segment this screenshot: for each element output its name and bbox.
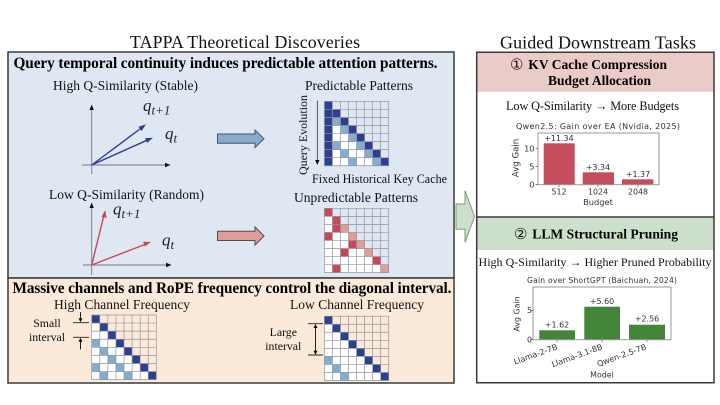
bar chart: gain over ShortGPT: +5.60	[590, 297, 614, 306]
heatmap: high channel frequency	[92, 315, 156, 380]
chart: stable query vectors: t	[174, 130, 178, 146]
title: TAPPA Theoretical Discoveries: TAPPA Theoretical Discoveries	[130, 32, 360, 52]
bar chart: Qwen2.5 gain over EA: 0	[529, 180, 534, 190]
bar chart: gain over ShortGPT: +2.56	[635, 315, 659, 324]
title: Guided Downstream Tasks: Guided Downstream Tasks	[500, 32, 696, 52]
chart: random query vectors: t	[170, 237, 174, 252]
text: high Q-similarity higher pruned probability: High Q-Similarity → Higher Pruned Probability	[478, 255, 712, 269]
heatmap: predictable attention	[324, 101, 389, 166]
bar chart: gain over ShortGPT: Qwen-2.5-7B	[596, 342, 648, 369]
label: query evolution: Query Evolution	[296, 95, 310, 175]
bar chart: Qwen2.5 gain over EA: 5	[529, 162, 534, 172]
chart: random query vectors	[83, 200, 174, 275]
chart: stable query vectors: q	[143, 96, 152, 115]
label: low channel frequency: Low Channel Frequency	[290, 297, 424, 312]
label: high Q-similarity: High Q-Similarity (Stable)	[53, 78, 198, 93]
annotation: large interval arrow	[308, 324, 323, 355]
label: small interval: Small	[33, 316, 61, 330]
bar chart: gain over ShortGPT: Model	[590, 371, 614, 380]
heatmap: low channel frequency	[324, 316, 389, 381]
heading: query temporal continuity: Query temporal continuity induces predictable attention patterns.	[14, 55, 438, 72]
heatmap: unpredictable attention	[324, 208, 389, 273]
panel: KV cache compression	[477, 52, 714, 217]
bar chart: Qwen2.5 gain over EA: 1024	[588, 188, 608, 197]
bar chart: Qwen2.5 gain over EA: 2048	[628, 188, 648, 197]
bar chart: gain over ShortGPT: Llama-2-7B	[513, 342, 559, 367]
bar chart: gain over ShortGPT: Llama-3.1-8B	[550, 342, 604, 369]
label: predictable patterns: Predictable Patterns	[305, 78, 413, 93]
bar chart: Qwen2.5 gain over EA: +3.34	[586, 163, 610, 172]
header: LLM structural pruning	[477, 217, 714, 250]
heading: massive channels and RoPE: Massive channels and RoPE frequency control the diagonal interval.	[12, 280, 452, 297]
label: small interval	[29, 316, 66, 344]
chart: stable query vectors: t+1	[152, 102, 170, 118]
header: KV cache compression: KV Cache Compression	[528, 57, 667, 72]
bar chart: Qwen2.5 gain over EA: +1.37	[626, 170, 650, 179]
bar chart: gain over ShortGPT: 5	[527, 306, 532, 315]
label: high channel frequency: High Channel Frequency	[54, 297, 190, 312]
bar chart: Qwen2.5 gain over EA: +11.34	[544, 134, 574, 143]
chart: random query vectors: t+1	[122, 206, 140, 221]
bar chart: Qwen2.5 gain over EA: 512	[551, 188, 567, 197]
panel: query temporal continuity	[8, 52, 454, 278]
label: large interval: Large	[270, 325, 297, 339]
label: fixed historical key cache: Fixed Historical Key Cache	[312, 172, 447, 186]
annotation: small interval arrows	[73, 312, 89, 350]
bar chart: gain over ShortGPT: Avg Gain	[512, 296, 522, 332]
chart: random query vectors: q	[162, 230, 170, 250]
label: unpredictable patterns: Unpredictable Patterns	[294, 190, 418, 205]
bar chart: gain over ShortGPT: Gain over ShortGPT (Baichuan, 2024)	[527, 276, 677, 285]
bar chart: Qwen2.5 gain over EA: 10	[524, 144, 534, 154]
header: KV cache compression	[477, 52, 714, 92]
bar chart: Qwen2.5 gain over EA	[512, 122, 680, 207]
text: low Q-similarity more budgets: Low Q-Similarity → More Budgets	[506, 99, 679, 113]
panel: LLM structural pruning	[477, 217, 714, 383]
label: large interval	[265, 325, 302, 353]
bar chart: gain over ShortGPT: 0	[527, 336, 532, 344]
bar chart: gain over ShortGPT	[512, 276, 677, 380]
arrow: query evolution	[315, 101, 319, 165]
bar chart: Qwen2.5 gain over EA: Avg Gain	[512, 139, 522, 177]
header: KV cache compression: ①	[510, 58, 523, 74]
chart: random query vectors: q	[113, 200, 122, 218]
header: LLM structural pruning: LLM Structural Pruning	[532, 226, 678, 241]
panel: massive channels and RoPE	[8, 278, 454, 383]
arrow: blue to predictable patterns	[218, 130, 264, 148]
header: LLM structural pruning: ②	[514, 227, 527, 243]
chart: stable query vectors: q	[165, 124, 174, 143]
label: small interval: interval	[29, 330, 66, 344]
chart: stable query vectors	[82, 96, 178, 174]
header: KV cache compression: Budget Allocation	[548, 73, 651, 88]
bar chart: gain over ShortGPT: +1.62	[545, 321, 569, 330]
bar chart: Qwen2.5 gain over EA: Budget	[583, 197, 614, 207]
arrow: red to unpredictable patterns	[218, 227, 264, 245]
label: low Q-similarity: Low Q-Similarity (Random)	[49, 187, 204, 202]
arrow: discoveries to tasks	[456, 191, 474, 242]
label: large interval: interval	[265, 339, 302, 353]
bar chart: Qwen2.5 gain over EA: Qwen2.5: Gain over EA (Nvidia, 2025)	[516, 122, 680, 131]
